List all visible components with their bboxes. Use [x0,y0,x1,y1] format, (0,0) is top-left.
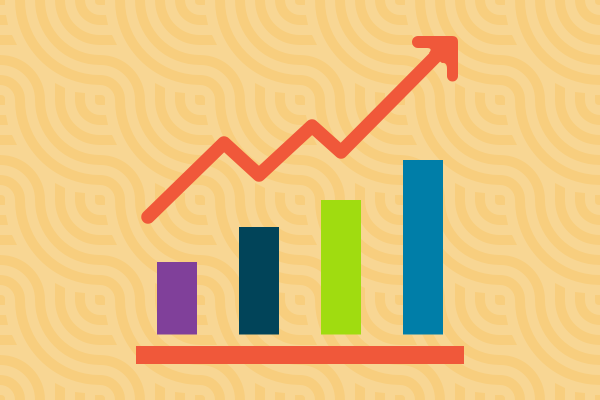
trend arrow [148,36,458,217]
bar chart [157,160,443,334]
bar: navy [239,227,279,334]
arrowhead [412,36,458,82]
bar: purple [157,262,197,334]
bar: green [321,200,361,334]
baseline [136,346,464,364]
arrow shaft: zigzag line [148,44,448,217]
bar: blue [403,160,443,334]
